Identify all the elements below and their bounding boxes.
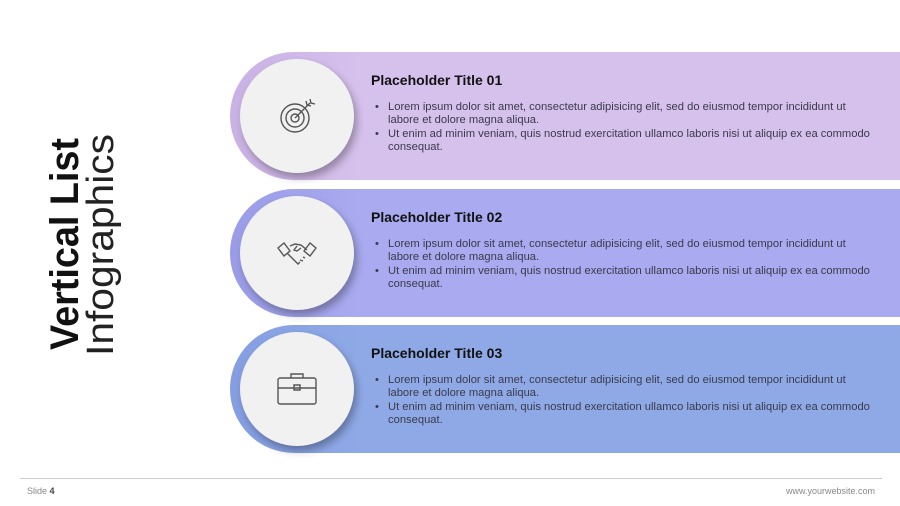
text block 1: Ut enim ad minim veniam, quis nostrud exercitation ullamco laboris nisi ut aliquip ex ea commodo consequat.	[388, 128, 870, 153]
text block 3: Placeholder Title 03	[371, 345, 502, 361]
vertical title	[43, 134, 122, 356]
panel: item 2	[230, 189, 900, 317]
text block 1: Lorem ipsum dolor sit amet, consectetur adipisicing elit, sed do eiusmod tempor incididunt ut labore et dolore magna aliqua.	[388, 101, 846, 126]
text block 2: Ut enim ad minim veniam, quis nostrud exercitation ullamco laboris nisi ut aliquip ex ea commodo consequat.	[388, 265, 870, 290]
text block 3: Ut enim ad minim veniam, quis nostrud exercitation ullamco laboris nisi ut aliquip ex ea commodo consequat.	[388, 401, 870, 426]
text block 1	[371, 72, 870, 153]
text block 3	[371, 345, 870, 426]
text block 3: Lorem ipsum dolor sit amet, consectetur adipisicing elit, sed do eiusmod tempor incididunt ut labore et dolore magna aliqua.	[388, 374, 846, 399]
text block 2: Placeholder Title 02	[371, 209, 502, 225]
footer: slide number: Slide 4	[27, 486, 55, 496]
text block 2	[371, 209, 870, 290]
icon: briefcase	[240, 332, 354, 446]
panel: item 3	[230, 325, 900, 453]
text block 1: Placeholder Title 01	[371, 72, 502, 88]
vertical title: Vertical List	[43, 138, 87, 350]
icon: target	[240, 59, 354, 173]
panel: item 1	[230, 52, 900, 180]
vertical title: Infographics	[80, 134, 122, 356]
text block 2: Lorem ipsum dolor sit amet, consectetur adipisicing elit, sed do eiusmod tempor incididunt ut labore et dolore magna aliqua.	[388, 238, 846, 263]
icon: handshake	[240, 196, 354, 310]
footer: website: www.yourwebsite.com	[786, 486, 875, 496]
